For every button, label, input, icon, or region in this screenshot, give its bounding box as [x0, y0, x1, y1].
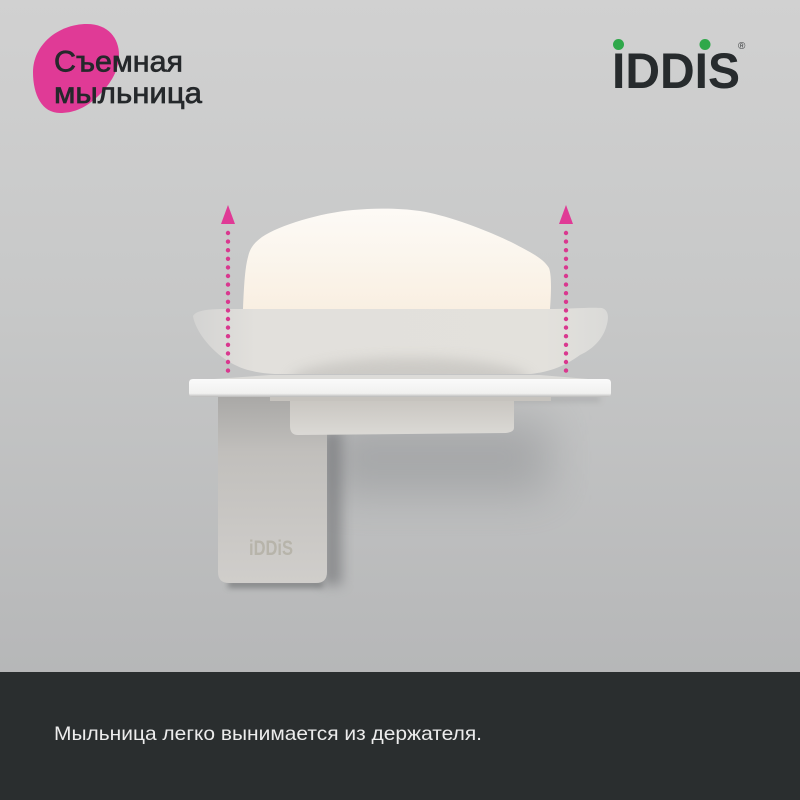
bottom caption band [0, 672, 800, 800]
brand logo: ® [738, 41, 746, 52]
frosted dish lower cup [290, 400, 514, 435]
soap bar [243, 209, 551, 309]
bracket logo: iDDiS [249, 537, 293, 560]
arrow: right lift [559, 205, 573, 372]
heading: мыльница [54, 77, 203, 110]
holder plate [189, 375, 611, 401]
badge: pink blob [33, 24, 119, 113]
brand logo: IDDIS [612, 43, 740, 99]
heading: Съемная [54, 46, 183, 78]
wall shadows [228, 396, 600, 588]
frosted soap dish [193, 308, 608, 374]
wall bracket [218, 396, 327, 583]
heading [54, 46, 203, 110]
caption text: Мыльница легко вынимается из держателя. [54, 723, 482, 745]
arrow: left lift [221, 205, 235, 372]
